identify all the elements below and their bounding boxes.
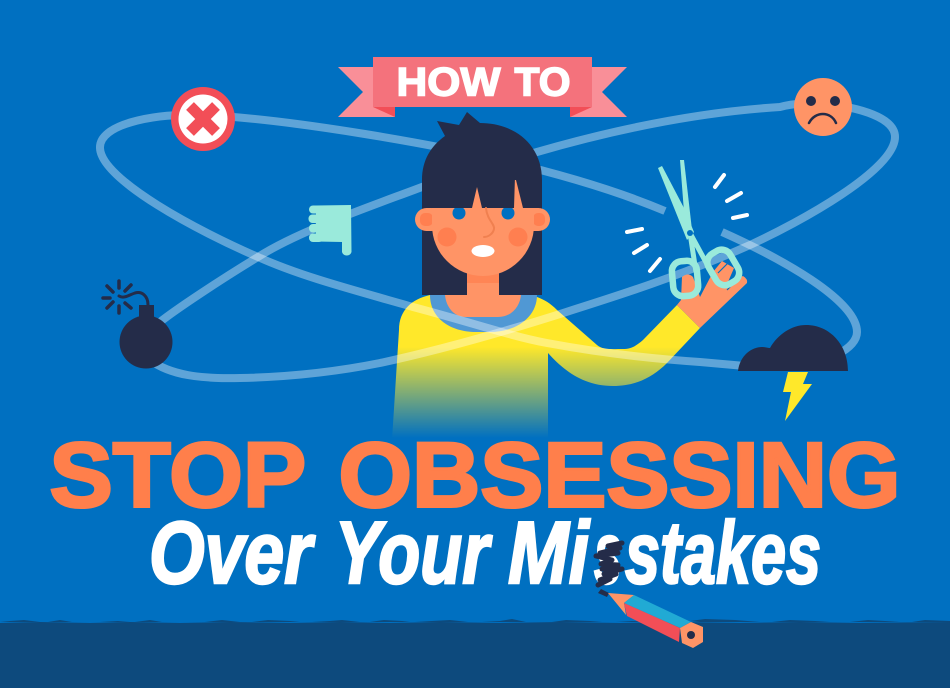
orbit loop A right part — [722, 232, 857, 354]
right fold — [570, 107, 592, 117]
fist — [316, 205, 352, 255]
ground band — [0, 619, 950, 688]
left cheek — [438, 228, 456, 246]
icon: lightning bolt — [783, 372, 812, 421]
left fold — [373, 107, 395, 117]
orbit loop B — [160, 103, 823, 322]
finger 4 — [309, 234, 323, 242]
banner text: TO — [514, 60, 570, 104]
pencil red side — [624, 603, 680, 642]
banner body — [373, 57, 592, 107]
finger gaps — [718, 263, 734, 290]
palm and fingers — [677, 261, 747, 328]
red ring — [171, 87, 235, 151]
left ear — [415, 208, 443, 231]
right inner ear — [533, 213, 545, 226]
face disc — [794, 78, 852, 136]
word: over: Over — [149, 503, 316, 602]
right finger ring — [704, 246, 743, 289]
fuse sparks — [103, 281, 131, 313]
left inner ear — [420, 213, 433, 226]
left finger ring — [671, 260, 699, 297]
icon: pencil — [598, 589, 703, 648]
word: your: Your — [335, 503, 493, 602]
left eye — [452, 206, 466, 220]
crossed out letter: s — [594, 503, 622, 602]
right eye — [502, 206, 514, 220]
icon: bomb — [103, 281, 172, 368]
rough brush edge — [0, 619, 950, 622]
back hair — [422, 112, 542, 295]
pencil core — [687, 631, 695, 639]
shirt with fading sleeve — [392, 295, 700, 440]
icon: red cross — [171, 87, 235, 151]
bomb body — [120, 316, 172, 368]
word: mi: Mi — [508, 503, 590, 602]
scribble — [596, 543, 622, 585]
orbit loop A — [100, 115, 745, 366]
bomb cap — [139, 305, 154, 319]
nose — [484, 208, 494, 237]
pencil blue side — [624, 595, 691, 628]
figure: shirt and collar — [392, 295, 700, 440]
finger 3 — [309, 224, 323, 232]
fuse — [119, 293, 148, 305]
icon: scissors — [658, 160, 743, 297]
left tail — [338, 67, 395, 117]
title: stop obsessing: STOP — [50, 424, 304, 526]
hand — [677, 261, 747, 328]
mouth — [472, 245, 494, 257]
orbit loop B lower part — [150, 104, 895, 378]
left eye — [806, 96, 816, 106]
figure: head — [415, 112, 550, 298]
handles — [690, 233, 708, 272]
ground fill — [0, 622, 950, 688]
white disc — [178, 94, 228, 144]
banner text: HOW — [396, 60, 501, 104]
pencil wood — [608, 593, 634, 615]
icon: thumbs down — [308, 205, 352, 255]
right tail — [570, 67, 627, 117]
pencil end — [680, 622, 703, 648]
snip sparks — [627, 175, 747, 271]
right ear — [522, 208, 550, 231]
icon: storm cloud — [738, 325, 848, 371]
cross mark — [190, 106, 216, 132]
pencil lead — [598, 589, 609, 597]
face — [432, 180, 534, 276]
neckline skin — [445, 295, 521, 317]
pivot — [687, 230, 693, 236]
frown — [809, 114, 836, 123]
subtitle: over your mistakes — [149, 503, 821, 602]
icon: sad face — [794, 78, 852, 136]
banner — [338, 57, 627, 117]
right cheek — [508, 228, 528, 246]
right blade — [680, 160, 692, 230]
left blade — [658, 166, 694, 240]
fringe — [430, 170, 536, 208]
neck shadow — [467, 268, 499, 283]
right eye — [830, 96, 840, 106]
title: stop obsessing: OBSESSING — [338, 424, 900, 526]
word: stakes: stakes — [625, 503, 821, 602]
finger 2 — [308, 214, 322, 223]
finger 1 — [309, 206, 323, 214]
orbit loops — [100, 103, 895, 378]
collar — [430, 295, 537, 332]
neck — [467, 268, 499, 298]
